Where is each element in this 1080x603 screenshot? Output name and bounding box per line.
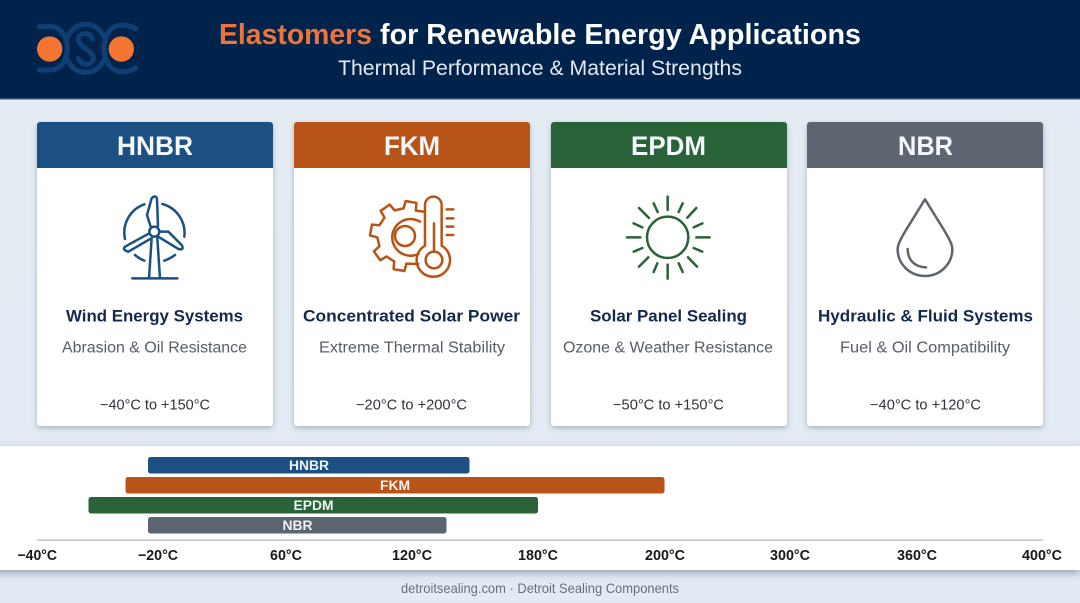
- bar: NBR: NBR: [282, 518, 313, 533]
- bar: NBR: [148, 517, 446, 534]
- bar: EPDM: EPDM: [294, 498, 334, 513]
- label: strength: Extreme Thermal Stability: [319, 340, 505, 356]
- label: application: Concentrated Solar Power: [303, 306, 520, 326]
- icon: fluid drop: [898, 199, 952, 276]
- icon: sun: [627, 197, 710, 279]
- label: application: Hydraulic & Fluid Systems: [818, 306, 1033, 326]
- bar: HNBR: [148, 457, 470, 474]
- temperature axis: 400°C: [1022, 548, 1063, 564]
- bar: FKM: FKM: [380, 478, 410, 493]
- footer: detroitsealing.com · Detroit Sealing Components: [401, 580, 679, 596]
- heading: HNBR: HNBR: [117, 131, 193, 161]
- chart: temperature range bars: [0, 446, 1080, 570]
- title: Elastomers: [219, 19, 372, 51]
- panel: NBR card: [807, 122, 1043, 426]
- heading: EPDM: EPDM: [631, 131, 706, 161]
- temperature axis: [18, 540, 1063, 564]
- panel: FKM card: [294, 122, 530, 426]
- temperature axis: 200°C: [645, 548, 686, 564]
- bar: HNBR: HNBR: [289, 458, 329, 473]
- heading: NBR: NBR: [898, 131, 953, 161]
- title: for Renewable Energy Applications: [380, 19, 861, 51]
- temperature axis: −20°C: [138, 548, 179, 564]
- logo: [37, 24, 136, 72]
- label: application: Solar Panel Sealing: [590, 306, 747, 326]
- panel: HNBR card: [37, 122, 273, 426]
- label: strength: Fuel & Oil Compatibility: [840, 340, 1010, 356]
- temperature axis: 360°C: [897, 548, 938, 564]
- temperature axis: 120°C: [392, 548, 433, 564]
- heading: FKM: FKM: [384, 131, 440, 161]
- label: strength: Ozone & Weather Resistance: [563, 340, 773, 356]
- temperature axis: 180°C: [518, 548, 559, 564]
- subtitle: Thermal Performance & Material Strengths: [338, 57, 742, 80]
- label: application: Wind Energy Systems: [66, 306, 243, 326]
- header banner: [0, 0, 1080, 100]
- label: temperature range: −40°C to +120°C: [870, 398, 981, 414]
- label: temperature range: −20°C to +200°C: [356, 398, 467, 414]
- bar: EPDM: [88, 497, 538, 514]
- temperature axis: 60°C: [270, 548, 303, 564]
- temperature axis: 300°C: [770, 548, 811, 564]
- label: strength: Abrasion & Oil Resistance: [62, 340, 247, 356]
- temperature axis: −40°C: [18, 548, 58, 564]
- label: temperature range: −50°C to +150°C: [613, 398, 724, 414]
- icon: wind turbine: [124, 196, 185, 278]
- panel: EPDM card: [551, 122, 787, 426]
- bar: FKM: [126, 477, 664, 494]
- icon: gear and thermometer: [370, 197, 453, 277]
- label: temperature range: −40°C to +150°C: [100, 398, 210, 414]
